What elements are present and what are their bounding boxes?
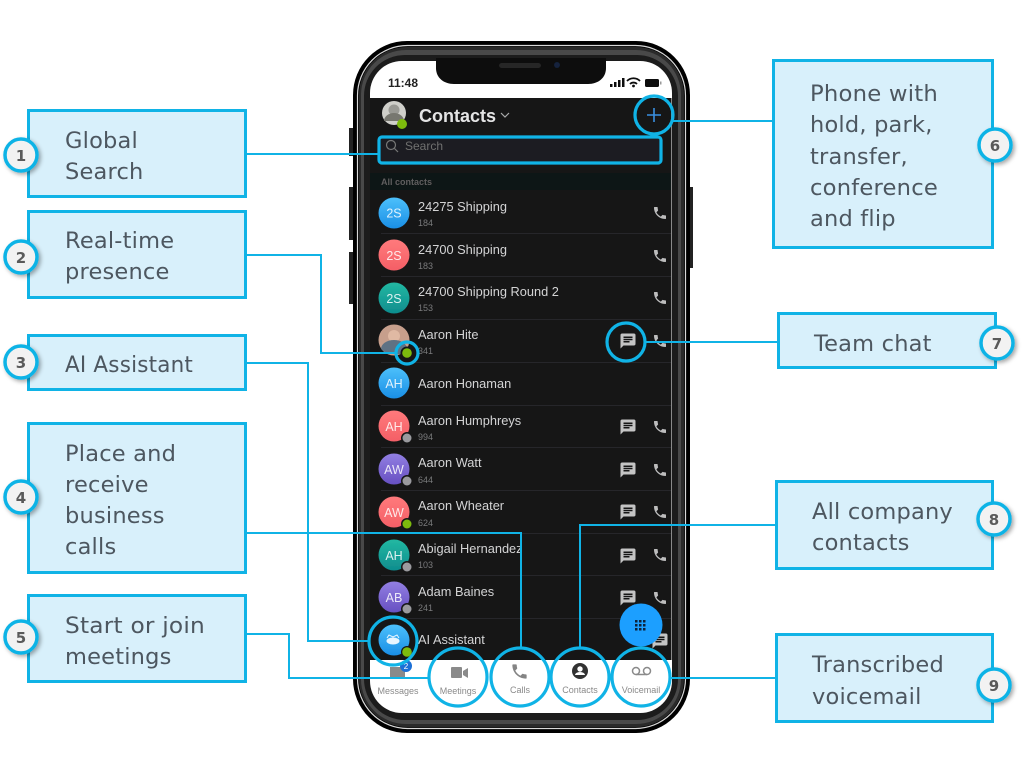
- phone side buttons: [349, 128, 693, 304]
- contact: 24275 Shipping: [378, 198, 666, 228]
- contact: Adam Baines: 241: [418, 603, 433, 613]
- callout 1: Global Search: Global: [65, 128, 138, 154]
- phone body: [353, 41, 690, 733]
- callout 6: Phone features: Phone with: [810, 81, 938, 107]
- callout 5: Start or join meetings: meetings: [65, 644, 172, 670]
- callout 1: Global Search: 1: [16, 147, 26, 165]
- contact: Abigail Hernandez: Abigail Hernandez: [418, 541, 523, 556]
- contact: Aaron Hite: Aaron Hite: [418, 327, 478, 342]
- contact: 24700 Shipping: 24700 Shipping: [418, 242, 507, 257]
- search field: [379, 137, 661, 163]
- contact: Adam Baines: Adam Baines: [418, 584, 494, 599]
- contact: 24700 Shipping: [378, 240, 666, 271]
- contact: Aaron Hite: [378, 324, 666, 360]
- callout 1: Global Search: Search: [65, 159, 144, 185]
- plus icon: [647, 108, 661, 122]
- callout 4: Place and receive business calls: receive: [65, 472, 149, 498]
- section label: [370, 173, 671, 190]
- tab: Voicemail: [622, 668, 660, 695]
- callout 5: Start or join meetings: [5, 596, 246, 682]
- callout 3: AI Assistant: [5, 336, 246, 390]
- contact: Aaron Watt: Aaron Watt: [418, 455, 482, 470]
- contact: Aaron Wheater: 624: [418, 518, 433, 528]
- header: profile avatar: [382, 101, 407, 129]
- callout 6: Phone features: hold, park,: [810, 112, 933, 138]
- contact: 24700 Shipping Round 2: 24700 Shipping Round 2: [418, 284, 559, 299]
- callout 6: Phone features: conference: [810, 175, 938, 201]
- callout 7: Team chat: [778, 314, 1013, 368]
- tab: Voicemail: Voicemail: [622, 685, 660, 695]
- tab: Meetings: [440, 667, 477, 696]
- contact: AI Assistant: AI Assistant: [418, 632, 485, 647]
- contact: Aaron Wheater: Aaron Wheater: [418, 498, 505, 513]
- highlight rings: [369, 96, 673, 706]
- tab: Messages: 2: [404, 662, 409, 671]
- callout 6: Phone features: 6: [990, 137, 1000, 155]
- callout 5: Start or join meetings: Start or join: [65, 613, 205, 639]
- contact: Adam Baines: AB: [386, 591, 402, 605]
- contact: 24275 Shipping: 24275 Shipping: [418, 199, 507, 214]
- callout 9: Transcribed voicemail: voicemail: [812, 684, 922, 710]
- contact: Aaron Watt: [378, 454, 666, 487]
- phone screen: [370, 58, 672, 713]
- contact: Abigail Hernandez: [378, 540, 666, 573]
- row dividers: [381, 234, 671, 618]
- connector lines: [246, 121, 778, 678]
- callout 1: Global Search: [5, 110, 246, 196]
- callout 4: Place and receive business calls: Place and: [65, 441, 176, 467]
- tab: Calls: [510, 664, 530, 695]
- contact: AI Assistant: [378, 624, 668, 658]
- callout 4: Place and receive business calls: 4: [16, 489, 26, 507]
- contact: Aaron Hite: 341: [418, 346, 433, 356]
- callout 7: Team chat: Team chat: [813, 331, 932, 357]
- dialpad button: [620, 604, 662, 646]
- search field: Search: [405, 139, 443, 153]
- contact: Aaron Humphreys: 994: [418, 432, 433, 442]
- callout 8: All company contacts: [776, 482, 1010, 568]
- contact: Aaron Honaman: Aaron Honaman: [418, 376, 511, 391]
- tab bar: [377, 660, 660, 696]
- contact: Aaron Honaman: AH: [385, 377, 403, 391]
- contact: 24700 Shipping: 2S: [386, 249, 402, 263]
- callout 6: Phone features: and flip: [810, 206, 896, 232]
- contact: Aaron Humphreys: [378, 410, 666, 444]
- notch: [436, 58, 606, 84]
- callout 8: All company contacts: All company: [812, 499, 953, 525]
- tab: Calls: Calls: [510, 685, 530, 695]
- contact: Aaron Humphreys: Aaron Humphreys: [418, 413, 521, 428]
- callout 8: All company contacts: 8: [989, 511, 999, 529]
- callout 9: Transcribed voicemail: 9: [989, 677, 999, 695]
- phone: [349, 41, 693, 733]
- callout 2: Real-time presence: 2: [16, 249, 26, 267]
- callout 9: Transcribed voicemail: [776, 634, 1010, 722]
- tab: Contacts: Contacts: [562, 685, 598, 695]
- tab: Messages: Messages: [377, 686, 419, 696]
- contact: Adam Baines: [378, 582, 666, 615]
- contact: Abigail Hernandez: AH: [385, 549, 403, 563]
- callout 8: All company contacts: contacts: [812, 530, 910, 556]
- callout 2: Real-time presence: [5, 212, 246, 298]
- callout 5: Start or join meetings: 5: [16, 629, 26, 647]
- contact: Aaron Humphreys: AH: [385, 420, 403, 434]
- contact: 24700 Shipping Round 2: 2S: [386, 292, 402, 306]
- tab: Contacts: [562, 663, 598, 695]
- section label: All contacts: [381, 177, 432, 187]
- contact: 24700 Shipping Round 2: 153: [418, 303, 433, 313]
- tab: Messages: [377, 660, 419, 696]
- callout 3: AI Assistant: AI Assistant: [65, 352, 193, 378]
- callout 6: Phone features: transfer,: [810, 144, 908, 170]
- contact: Aaron Honaman: [378, 368, 511, 398]
- tab: Meetings: Meetings: [440, 686, 477, 696]
- callout 6: Phone features: [774, 60, 1011, 248]
- status bar: 11:48: [388, 76, 418, 90]
- contact: 24700 Shipping: 183: [418, 261, 433, 271]
- contact: Aaron Watt: 644: [418, 475, 433, 485]
- callout 4: Place and receive business calls: business: [65, 503, 165, 529]
- header: Contacts title: Contacts: [419, 106, 496, 126]
- callout 4: Place and receive business calls: [5, 424, 246, 572]
- callout 9: Transcribed voicemail: Transcribed: [811, 652, 944, 678]
- contact: Aaron Wheater: [378, 496, 666, 530]
- contact: 24700 Shipping Round 2: [378, 282, 666, 314]
- callout 2: Real-time presence: presence: [65, 259, 170, 285]
- callout 3: AI Assistant: 3: [16, 354, 26, 372]
- contact: Aaron Watt: AW: [384, 463, 404, 477]
- callout 2: Real-time presence: Real-time: [65, 228, 174, 254]
- callout 7: Team chat: 7: [992, 335, 1002, 353]
- contact: 24275 Shipping: 184: [418, 218, 433, 228]
- callout 4: Place and receive business calls: calls: [65, 534, 116, 560]
- contact: Aaron Wheater: AW: [384, 506, 404, 520]
- contact: 24275 Shipping: 2S: [386, 206, 402, 220]
- contact: Abigail Hernandez: 103: [418, 560, 433, 570]
- status bar: [388, 76, 662, 90]
